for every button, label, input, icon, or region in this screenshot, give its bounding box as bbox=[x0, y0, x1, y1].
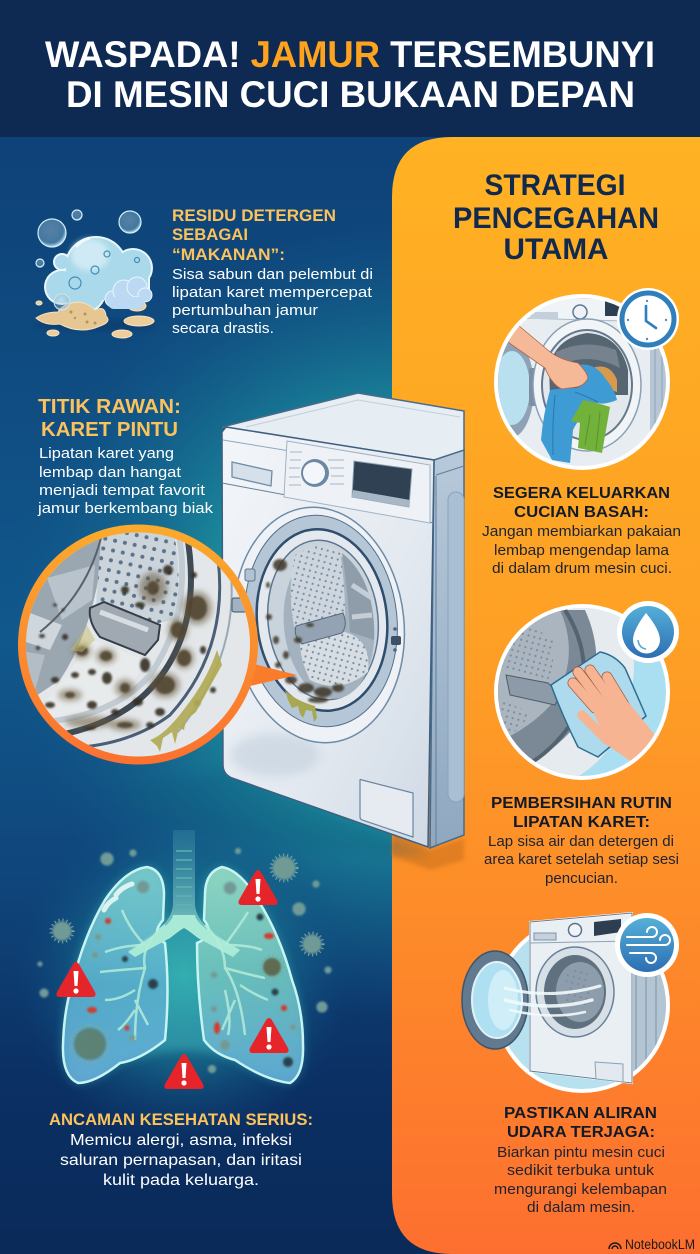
mould around gasket bbox=[266, 559, 344, 703]
panel heading: strategi pencegahan utama: PENCEGAHAN bbox=[453, 202, 659, 235]
panel heading: strategi pencegahan utama: STRATEGI bbox=[484, 169, 626, 202]
text block: pembersihan rutin: area karet setelah setiap sesi bbox=[484, 852, 679, 868]
text block: pembersihan rutin bbox=[484, 795, 679, 887]
display bbox=[352, 461, 412, 507]
text block: residu detergen: pertumbuhan jamur bbox=[172, 302, 318, 319]
mould halos bbox=[58, 572, 212, 731]
text block: ancaman kesehatan: saluran pernapasan, dan iritasi bbox=[60, 1152, 302, 1169]
text block: pembersihan rutin: LIPATAN KARET: bbox=[513, 814, 650, 831]
paddle bbox=[90, 602, 160, 655]
soft shading under door bbox=[230, 733, 320, 777]
orange garment bbox=[592, 366, 617, 392]
badge: clock bbox=[617, 288, 679, 350]
text block: residu detergen: SEBAGAI bbox=[172, 225, 248, 244]
magnifier callout: mould on door gasket bbox=[15, 520, 265, 770]
badge: water drop bbox=[617, 601, 679, 663]
blue towel bbox=[541, 365, 617, 463]
text block: residu detergen bbox=[172, 206, 373, 337]
callout pointer bbox=[250, 663, 297, 686]
latch bbox=[232, 598, 246, 612]
shadow on orange panel bbox=[392, 826, 464, 870]
text block: residu detergen: “MAKANAN”: bbox=[172, 245, 285, 264]
spores bbox=[38, 848, 331, 1072]
text block: residu detergen: lipatan karet mempercepat bbox=[172, 284, 373, 301]
text block: segera keluarkan: di dalam drum mesin cuci. bbox=[492, 561, 672, 577]
drum spokes bbox=[26, 538, 103, 695]
drum paddle bbox=[295, 613, 345, 644]
rim arcs bbox=[45, 525, 182, 722]
open door bbox=[462, 951, 528, 1049]
perforated upper drum bbox=[96, 525, 178, 625]
text block: titik rawan: KARET PINTU bbox=[41, 418, 178, 441]
hand bbox=[568, 664, 654, 761]
illustration: taking out wet laundry bbox=[486, 288, 680, 480]
notebooklm watermark: NotebookLM bbox=[625, 1237, 695, 1252]
text block: segera keluarkan: CUCIAN BASAH: bbox=[514, 504, 649, 521]
illustration: wiping rubber fold bbox=[494, 601, 679, 780]
text block: titik rawan: TITIK RAWAN: bbox=[38, 395, 181, 418]
orange strategy panel bbox=[392, 137, 700, 1254]
text block: ancaman kesehatan: Memicu alergi, asma, infeksi bbox=[70, 1132, 292, 1149]
detergent drawer bbox=[232, 462, 272, 486]
text block: pastikan aliran bbox=[494, 1105, 667, 1216]
panel heading: strategi pencegahan utama: UTAMA bbox=[504, 233, 608, 266]
trachea bbox=[128, 830, 240, 957]
text block: segera keluarkan: lembap mengendap lama bbox=[494, 543, 670, 559]
text block: titik rawan: Lipatan karet yang bbox=[39, 445, 174, 462]
warning triangles bbox=[56, 870, 289, 1089]
text block: segera keluarkan: SEGERA KELUARKAN bbox=[493, 485, 670, 502]
text block: pembersihan rutin: pencucian. bbox=[545, 871, 618, 887]
lungs with spores bbox=[38, 830, 331, 1089]
washing machine bbox=[100, 393, 464, 870]
header band: DI MESIN CUCI BUKAAN DEPAN bbox=[66, 74, 635, 115]
text block: pastikan aliran: mengurangi kelembapan bbox=[494, 1182, 667, 1198]
text block: segera keluarkan bbox=[482, 485, 681, 577]
icon: soap bubbles and detergent residue bbox=[35, 210, 155, 338]
text block: pastikan aliran: Biarkan pintu mesin cuci bbox=[497, 1145, 665, 1161]
text block: pastikan aliran: di dalam mesin. bbox=[527, 1200, 635, 1216]
illustration: door ajar for airflow bbox=[462, 913, 679, 1095]
text block: pembersihan rutin: Lap sisa air dan detergen di bbox=[488, 834, 674, 850]
text block: titik rawan bbox=[37, 395, 214, 517]
text block: residu detergen: Sisa sabun dan pelembut di bbox=[172, 266, 373, 283]
left lung bbox=[63, 867, 168, 1083]
service flap bbox=[360, 780, 413, 837]
dripping slime bbox=[150, 650, 222, 752]
badge: wind bbox=[615, 913, 679, 977]
green towel bbox=[571, 400, 610, 453]
lung halo bbox=[63, 867, 303, 1083]
right lung bbox=[197, 867, 303, 1083]
text block: ancaman kesehatan: ANCAMAN KESEHATAN SERIUS: bbox=[49, 1110, 313, 1129]
dripping residue bbox=[285, 690, 317, 722]
text block: titik rawan: lembap dan hangat bbox=[39, 464, 182, 481]
mould spots bbox=[36, 565, 216, 730]
text block: pembersihan rutin: PEMBERSIHAN RUTIN bbox=[491, 795, 672, 812]
header band bbox=[0, 0, 700, 137]
text block: ancaman kesehatan: kulit pada keluarga. bbox=[103, 1172, 259, 1189]
text block: titik rawan: jamur berkembang biak bbox=[37, 500, 214, 517]
foam cloud bbox=[44, 236, 153, 313]
panel heading: strategi pencegahan utama bbox=[453, 169, 659, 266]
text block: pastikan aliran: UDARA TERJAGA: bbox=[507, 1124, 655, 1141]
arm bbox=[508, 326, 588, 390]
cloth bbox=[551, 652, 646, 757]
text block: segera keluarkan: Jangan membiarkan pakaian bbox=[482, 524, 681, 540]
air streams bbox=[505, 986, 600, 1016]
text block: titik rawan: menjadi tempat favorit bbox=[39, 482, 206, 499]
door ring bbox=[222, 499, 416, 751]
text block: residu detergen: RESIDU DETERGEN bbox=[172, 206, 336, 225]
control knob bbox=[301, 459, 329, 487]
drum opening bbox=[260, 535, 386, 705]
door hinge and latch bbox=[245, 569, 255, 581]
perforated lower drum bbox=[43, 704, 54, 718]
text block: pastikan aliran: PASTIKAN ALIRAN bbox=[504, 1105, 657, 1122]
text block: residu detergen: secara drastis. bbox=[172, 320, 274, 337]
text block: ancaman kesehatan bbox=[49, 1110, 313, 1189]
bronchial branches bbox=[100, 910, 268, 1040]
main bronchi overlay bbox=[128, 915, 240, 957]
title: WASPADA! JAMUR TERSEMBUNYI bbox=[45, 34, 655, 75]
text block: pastikan aliran: sedikit terbuka untuk bbox=[507, 1163, 655, 1179]
